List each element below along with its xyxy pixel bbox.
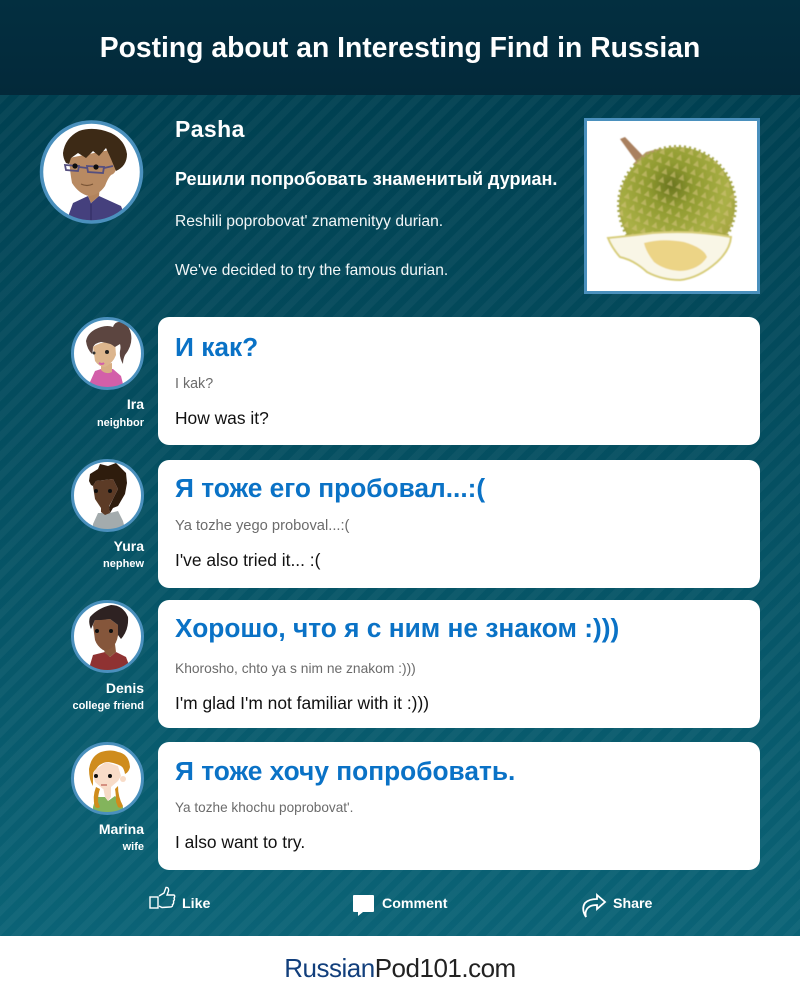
label: share: Share xyxy=(613,896,652,912)
transliteration: Ya tozhe khochu poprobovat'. xyxy=(175,800,353,815)
logo: RussianPod101.com: RussianPod101.com xyxy=(284,953,516,983)
name: Yura: Yura xyxy=(114,538,144,554)
translation: I've also tried it... :( xyxy=(175,550,320,570)
name: Marina: Marina xyxy=(99,821,144,837)
transliteration: Reshili poprobovat' znamenityy durian. xyxy=(175,213,443,230)
translation: I also want to try. xyxy=(175,832,305,852)
Russian comment: Я тоже хочу попробовать. xyxy=(175,756,515,786)
icon: like xyxy=(149,886,176,909)
Russian comment: И как? xyxy=(175,332,258,362)
Russian post text: Решили попробовать знаменитый дуриан. xyxy=(175,169,557,189)
avatar: Pasha xyxy=(40,120,144,224)
name: Ira: Ira xyxy=(127,396,144,412)
transliteration: I kak? xyxy=(175,376,213,392)
comment avatar: Ira xyxy=(71,317,144,390)
Russian comment: Хорошо, что я с ним не знаком :))) xyxy=(175,613,619,643)
comment card: Ira xyxy=(158,317,760,445)
comment card: Marina xyxy=(158,742,760,870)
comment avatar: Yura xyxy=(71,459,144,532)
translation: We've decided to try the famous durian. xyxy=(175,262,448,279)
name: Denis: Denis xyxy=(106,680,144,696)
translation: How was it? xyxy=(175,408,269,428)
comment avatar: Denis xyxy=(71,600,144,673)
comment avatar: Marina xyxy=(71,742,144,815)
label: like: Like xyxy=(182,896,210,912)
icon: share xyxy=(582,893,606,918)
header band xyxy=(0,0,800,95)
comment card: Yura xyxy=(158,460,760,588)
transliteration: Khorosho, chto ya s nim ne znakom :))) xyxy=(175,661,416,676)
role: nephew: nephew xyxy=(103,558,144,570)
title: Posting about an Interesting Find in Russian xyxy=(100,31,700,63)
transliteration: Ya tozhe yego proboval...:( xyxy=(175,518,349,534)
Russian comment: Я тоже его пробовал...:( xyxy=(175,473,485,503)
role: wife: wife xyxy=(123,841,144,853)
photo: durian xyxy=(584,118,760,294)
role: neighbor: neighbor xyxy=(97,417,144,429)
comment card: Denis xyxy=(158,600,760,728)
label: comment: Comment xyxy=(382,896,447,912)
icon: comment xyxy=(353,895,374,916)
translation: I'm glad I'm not familiar with it :))) xyxy=(175,693,429,713)
role: college friend: college friend xyxy=(72,700,144,712)
poster name: Pasha xyxy=(175,116,245,142)
